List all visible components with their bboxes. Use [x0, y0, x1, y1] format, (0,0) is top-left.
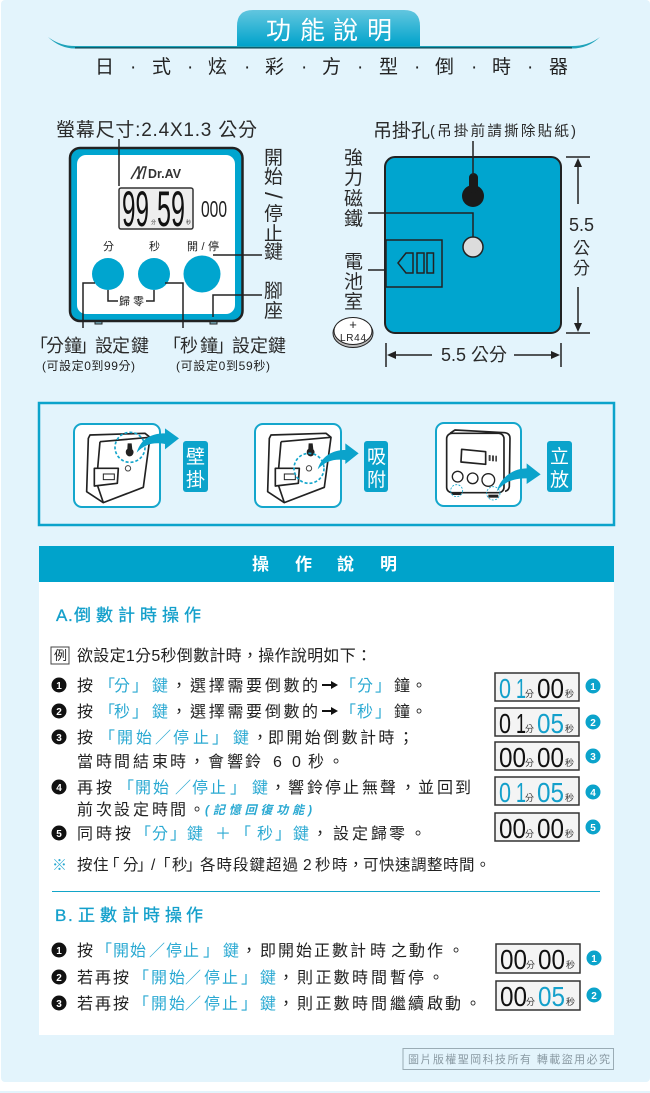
- LCD B2: 05: [538, 981, 565, 1012]
- LCD A1: 00: [537, 673, 564, 704]
- label: magnetic: [364, 441, 388, 492]
- second key label: (可設定0到59秒): [176, 358, 270, 373]
- step A2: 按: [77, 703, 93, 721]
- battery compartment: [386, 240, 442, 287]
- step B3: ，則正數時間繼續啟動。: [278, 995, 481, 1013]
- LCD screen: 秒: [186, 219, 191, 226]
- LCD B1: [496, 944, 580, 975]
- LCD B2: 分: [526, 997, 535, 1007]
- step A5: ，設定歸零。: [312, 825, 426, 843]
- LCD B2: [496, 981, 580, 1012]
- step B1: [52, 942, 464, 960]
- label: stand: [547, 441, 572, 492]
- title tab: [237, 10, 420, 46]
- screen size label: 螢幕尺寸:2.4X1.3 公分: [56, 119, 257, 141]
- panel: front view diagram: [30, 119, 286, 373]
- LCD number badges B: 1: [591, 954, 597, 965]
- step A4: 「開始／停止」鍵: [118, 779, 268, 797]
- device body: [70, 148, 242, 321]
- step A2: ，選擇需要倒數的: [171, 703, 318, 721]
- LCD B1: 00: [500, 944, 527, 975]
- note: ※: [52, 857, 67, 874]
- step A4: 再按: [77, 779, 112, 797]
- header swoosh: [48, 37, 600, 48]
- battery LR44: +: [349, 317, 357, 332]
- minute key label: 「分鐘」設定鍵: [30, 336, 149, 356]
- button labels: 秒: [149, 239, 160, 253]
- step A2: 「秒」: [340, 703, 391, 721]
- battery LR44: LR44: [340, 333, 366, 344]
- LCD A2: 秒: [565, 723, 574, 734]
- LCD number badges B: [586, 950, 602, 1002]
- step A1: 「分」: [99, 677, 148, 695]
- note: 按住「分」/「秒」各時段鍵超過2秒時，可快速調整時間。: [77, 856, 491, 874]
- LCD A1: 秒: [565, 688, 574, 699]
- leader lines: [83, 139, 262, 328]
- reset bracket: [108, 290, 154, 308]
- step B3: [52, 995, 481, 1013]
- step B1: ，即開始正數計時之動作。: [241, 942, 464, 960]
- step B3: 若再按: [77, 995, 129, 1013]
- step A3: ，即開始倒數計時；: [252, 729, 414, 747]
- step B2: ，則正數時間暫停。: [278, 969, 444, 987]
- LCD number badges A: [586, 678, 600, 834]
- step A3: 60: [273, 754, 301, 771]
- step B2: 2: [56, 973, 62, 984]
- card: wall mount: [74, 424, 179, 507]
- step A4: (記憶回復功能): [205, 803, 312, 817]
- step A3: 「開始／停止」鍵: [99, 729, 249, 747]
- LCD number badges A: 2: [590, 718, 596, 729]
- step A2: 2: [56, 707, 62, 718]
- copyright notice: 圖片版權聖岡科技所有 轉載盜用必究: [408, 1052, 610, 1066]
- step B1: 1: [56, 946, 62, 957]
- hang hole label: 吊掛孔: [373, 120, 430, 142]
- LCD A1: [495, 673, 579, 704]
- step B1: 按: [77, 942, 93, 960]
- label: stand: 立放: [550, 446, 569, 491]
- hang hole label: (吊掛前請撕除貼紙): [430, 123, 576, 140]
- magnet label: 強力磁鐵: [344, 147, 363, 230]
- step B1: 「開始／停止」鍵: [96, 942, 239, 960]
- step A1: 1: [56, 681, 62, 692]
- LCD column A: [495, 673, 600, 844]
- step A1: ，選擇需要倒數的: [171, 677, 318, 695]
- example intro: 例: [54, 648, 67, 663]
- instructions heading band: [39, 546, 614, 582]
- step A4: 前次設定時間。: [77, 801, 205, 819]
- width dimension: 5.5 公分: [441, 345, 507, 365]
- step A2: 鍵: [152, 703, 168, 721]
- step A5: 「分」鍵＋「秒」鍵: [135, 825, 309, 843]
- step A2: 「秒」: [99, 703, 148, 721]
- LCD A2: 05: [537, 708, 564, 739]
- instructions heading band: 操作說明: [252, 555, 397, 574]
- LCD B1: 秒: [566, 959, 575, 970]
- card: magnetic: [255, 424, 359, 507]
- step A3: 3: [56, 733, 62, 744]
- step A1: 鍵: [152, 677, 168, 695]
- LCD A5: 秒: [565, 828, 574, 839]
- subtitle: 日·式·炫·彩·方·型·倒·時·器: [95, 56, 568, 78]
- button labels: [103, 239, 219, 253]
- indicator holes: 000: [201, 196, 227, 222]
- keyhole: [462, 173, 484, 207]
- LCD A1: 分: [525, 689, 534, 699]
- step A1: 按: [77, 677, 93, 695]
- step B2: 「開始／停止」鍵: [133, 969, 276, 987]
- panel: mounting options: [39, 403, 614, 525]
- foot label: 腳座: [264, 280, 283, 322]
- LCD A2: 分: [525, 724, 534, 734]
- width dimension: [386, 343, 561, 367]
- LCD A3: [495, 742, 579, 773]
- minute key label: [30, 336, 149, 373]
- LCD A4: 05: [537, 777, 564, 808]
- LCD A3: 00: [499, 742, 526, 773]
- step A5: 同時按: [77, 825, 131, 843]
- step B3: 3: [56, 999, 62, 1010]
- device feet: [95, 320, 217, 324]
- LCD A4: [495, 777, 579, 808]
- step A3: 按: [77, 729, 93, 747]
- step A4: [52, 779, 471, 819]
- LCD number badges A: 4: [590, 788, 596, 799]
- step A4: ，響鈴停止無聲，並回到: [270, 779, 471, 797]
- LCD B1: 00: [538, 944, 565, 975]
- battery LR44: [333, 317, 373, 348]
- step A1: 鐘。: [394, 677, 427, 695]
- panel: operation instructions: [39, 546, 614, 1035]
- LCD A4: 秒: [565, 792, 574, 803]
- step B2: 若再按: [77, 969, 129, 987]
- LCD A2: 1: [516, 708, 526, 739]
- second key label: [163, 336, 286, 373]
- battery room label: 電池室: [344, 252, 363, 313]
- minute key label: (可設定0到99分): [42, 358, 135, 373]
- LCD number badges A: 3: [590, 752, 596, 763]
- LCD A4: 0: [499, 777, 511, 808]
- hang hole label: [373, 120, 576, 142]
- step A1: [52, 677, 427, 695]
- brand logo: [131, 166, 181, 181]
- LCD A4: 1: [516, 777, 526, 808]
- label: magnetic: 吸附: [367, 447, 386, 491]
- example intro: 欲設定1分5秒倒數計時，操作說明如下：: [77, 647, 372, 665]
- LCD screen: 分: [151, 220, 156, 226]
- start stop key label: /: [259, 192, 286, 199]
- button labels: 分: [103, 240, 114, 253]
- step A3: [52, 729, 414, 771]
- step A3: 秒。: [308, 753, 344, 771]
- LCD A1: 0: [499, 673, 511, 704]
- LCD B2: 00: [500, 981, 527, 1012]
- reset bracket: 歸零: [119, 294, 144, 308]
- LCD number badges A: 5: [590, 823, 596, 834]
- LCD number badges B: 2: [591, 991, 597, 1002]
- second key label: 「秒鐘」設定鍵: [163, 336, 286, 356]
- step A4: 4: [56, 783, 62, 794]
- section A heading: A.倒數計時操作: [56, 606, 201, 625]
- LCD A5: 分: [525, 829, 534, 839]
- LCD A2: [495, 708, 579, 739]
- start stop key label: 開始: [264, 148, 283, 188]
- LCD column B: [496, 944, 602, 1012]
- LCD A3: 分: [525, 758, 534, 768]
- step B3: 「開始／停止」鍵: [133, 995, 276, 1013]
- LCD A3: 秒: [565, 757, 574, 768]
- step A1: 「分」: [340, 677, 391, 695]
- label: wall mount: [183, 441, 208, 492]
- device back: [385, 157, 561, 333]
- LCD A5: [495, 813, 579, 844]
- copyright notice: [403, 1048, 614, 1070]
- title tab: 功能說明: [266, 17, 392, 45]
- LCD B2: 秒: [566, 996, 575, 1007]
- step A2: 鐘。: [394, 703, 427, 721]
- back leader lines: [368, 141, 473, 270]
- height dimension: [566, 157, 594, 333]
- height dimension: 5.5: [569, 215, 594, 235]
- LCD A1: 1: [516, 673, 526, 704]
- LCD number badges A: 1: [590, 682, 596, 693]
- LCD A4: 分: [525, 793, 534, 803]
- step A2: [52, 703, 427, 721]
- magnet: [463, 237, 483, 257]
- LCD A2: 0: [499, 708, 511, 739]
- step B2: [52, 969, 444, 987]
- LCD screen: 99: [122, 181, 149, 237]
- start stop key label: 停止鍵: [264, 203, 283, 263]
- step A3: 當時間結束時，會響鈴: [77, 753, 261, 771]
- section B heading: B.正數計時操作: [55, 906, 203, 925]
- start stop key label: [259, 148, 286, 263]
- LCD screen: 59: [157, 181, 185, 237]
- brand logo: Dr.AV: [148, 166, 181, 181]
- LCD A5: 00: [499, 813, 526, 844]
- step A5: [52, 825, 426, 843]
- panel: back view diagram: [333, 120, 594, 367]
- LCD A3: 00: [537, 742, 564, 773]
- buttons: [92, 256, 220, 292]
- height dimension: 公分: [573, 239, 590, 278]
- label: wall mount: 壁掛: [186, 446, 205, 491]
- instructions body: [39, 582, 614, 1035]
- button labels: 開/停: [187, 239, 219, 253]
- LCD B1: 分: [526, 960, 535, 970]
- card: stand: [436, 423, 541, 506]
- LCD A5: 00: [537, 813, 564, 844]
- step A5: 5: [56, 829, 62, 840]
